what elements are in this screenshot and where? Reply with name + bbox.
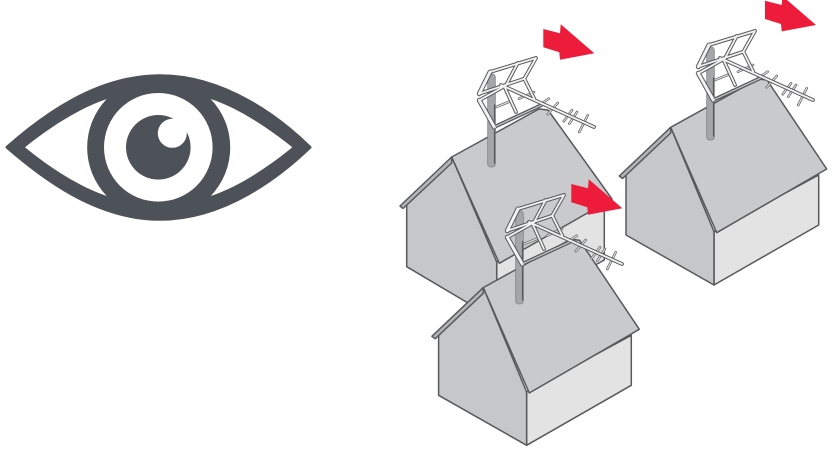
house: front [432, 239, 639, 445]
antenna: back right house [698, 31, 813, 140]
antenna: front house [507, 195, 622, 304]
house: back left [400, 109, 612, 320]
arrow: back left house [543, 24, 594, 60]
arrow: front house [571, 179, 622, 215]
arrow: back right house [765, 0, 816, 31]
icon: eye [7, 76, 310, 219]
house: back right [619, 79, 827, 285]
antenna: back left house [479, 58, 594, 167]
